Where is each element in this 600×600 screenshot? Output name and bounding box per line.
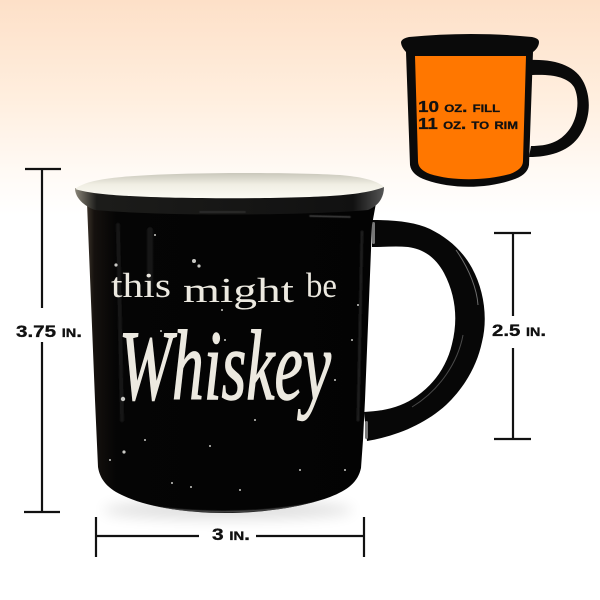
icon: small mug body (401, 34, 539, 187)
mug text: this might be: might (183, 271, 294, 310)
icon: orange fill area (415, 56, 526, 179)
rim outer dark band (75, 187, 384, 214)
mug text: this might be: this (111, 266, 171, 305)
mug rim and white interior (75, 173, 384, 198)
mug handle (364, 220, 485, 441)
dimension: handle 2.5 in: 2.5 in. (492, 321, 546, 340)
dimension: height 3.75 in: 3.75 in. (16, 322, 82, 341)
rim label: 11 oz. to rim (418, 116, 518, 133)
speckles (109, 234, 359, 491)
dimension: width 3 in: 3 in. (212, 525, 250, 544)
dimension: width 3 in (96, 517, 364, 557)
background gradient (0, 0, 600, 215)
mug shadow (103, 501, 353, 519)
icon: small mug handle (529, 60, 589, 157)
small mug capacity diagram (401, 34, 589, 187)
mug text: this might be (111, 266, 337, 310)
large mug (75, 173, 485, 519)
capacity text (418, 99, 518, 133)
fill label: 10 oz. fill (418, 99, 500, 116)
mug text: Whiskey: Whiskey (119, 310, 331, 421)
mug text: this might be: be (306, 266, 337, 305)
dimension: height 3.75 in (16, 169, 82, 512)
dimension: handle 2.5 in (492, 233, 546, 439)
mug body (87, 203, 376, 513)
glossy highlights (110, 199, 362, 512)
